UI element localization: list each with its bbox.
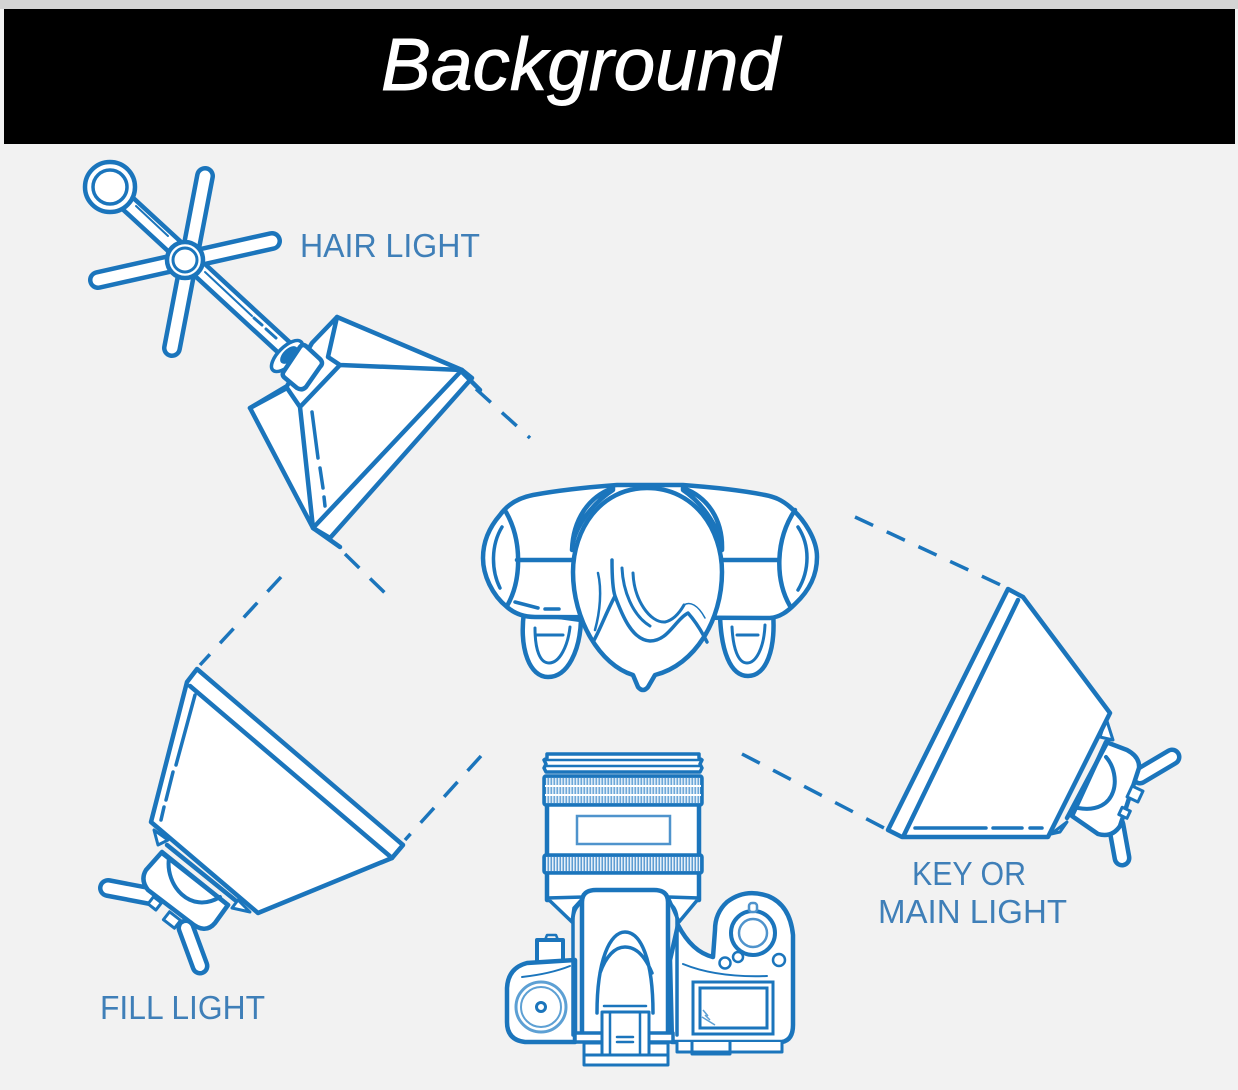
dashed beam: hair light lower	[345, 554, 386, 594]
softbox	[151, 669, 403, 913]
dashed beam: hair light upper	[476, 389, 530, 438]
softbox	[250, 317, 480, 547]
lens	[544, 754, 702, 900]
prism wings	[547, 897, 699, 922]
title bar	[4, 9, 1235, 144]
icon: camera seen from above	[507, 754, 793, 1065]
shoulders	[483, 485, 817, 618]
bottom edge buttons	[677, 1042, 782, 1054]
hub	[167, 242, 203, 278]
small buttons	[720, 952, 785, 968]
icon: hair light	[85, 162, 480, 547]
housing	[143, 852, 228, 929]
handles	[1116, 757, 1172, 858]
head	[572, 488, 722, 690]
dashed beam: fill light upper	[200, 577, 281, 665]
arms	[98, 176, 272, 348]
label: hair light: HAIR LIGHT	[300, 227, 480, 264]
label: fill light: FILL LIGHT	[100, 989, 265, 1026]
left body	[507, 935, 575, 1042]
lens label window	[577, 816, 670, 844]
boom stem	[110, 187, 290, 353]
dashed beam: key light upper	[855, 517, 1005, 587]
right body	[670, 893, 793, 1054]
icon: fill light	[108, 669, 403, 966]
prism	[573, 890, 677, 1035]
softbox	[888, 589, 1113, 837]
handles	[108, 888, 200, 966]
hair strands	[593, 560, 707, 642]
focus ring	[544, 776, 702, 805]
left dial	[516, 982, 566, 1032]
dashed beam: fill light lower	[405, 756, 481, 840]
icon: key light	[888, 589, 1172, 858]
shoes	[523, 612, 774, 677]
label: key or main light: MAIN LIGHT	[878, 893, 1067, 930]
collar	[266, 335, 322, 389]
label: key or main light: KEY OR	[912, 855, 1026, 892]
label: key or main light	[878, 855, 1067, 930]
top dial	[731, 903, 775, 955]
housing	[1072, 742, 1143, 835]
title: Background	[381, 23, 783, 106]
lcd screen	[693, 982, 773, 1034]
top ring	[85, 162, 135, 212]
aperture ring	[544, 855, 702, 873]
hot shoe and base	[575, 1006, 673, 1065]
dashed beam: key light lower	[742, 754, 886, 829]
icon: subject seen from above	[483, 485, 817, 690]
